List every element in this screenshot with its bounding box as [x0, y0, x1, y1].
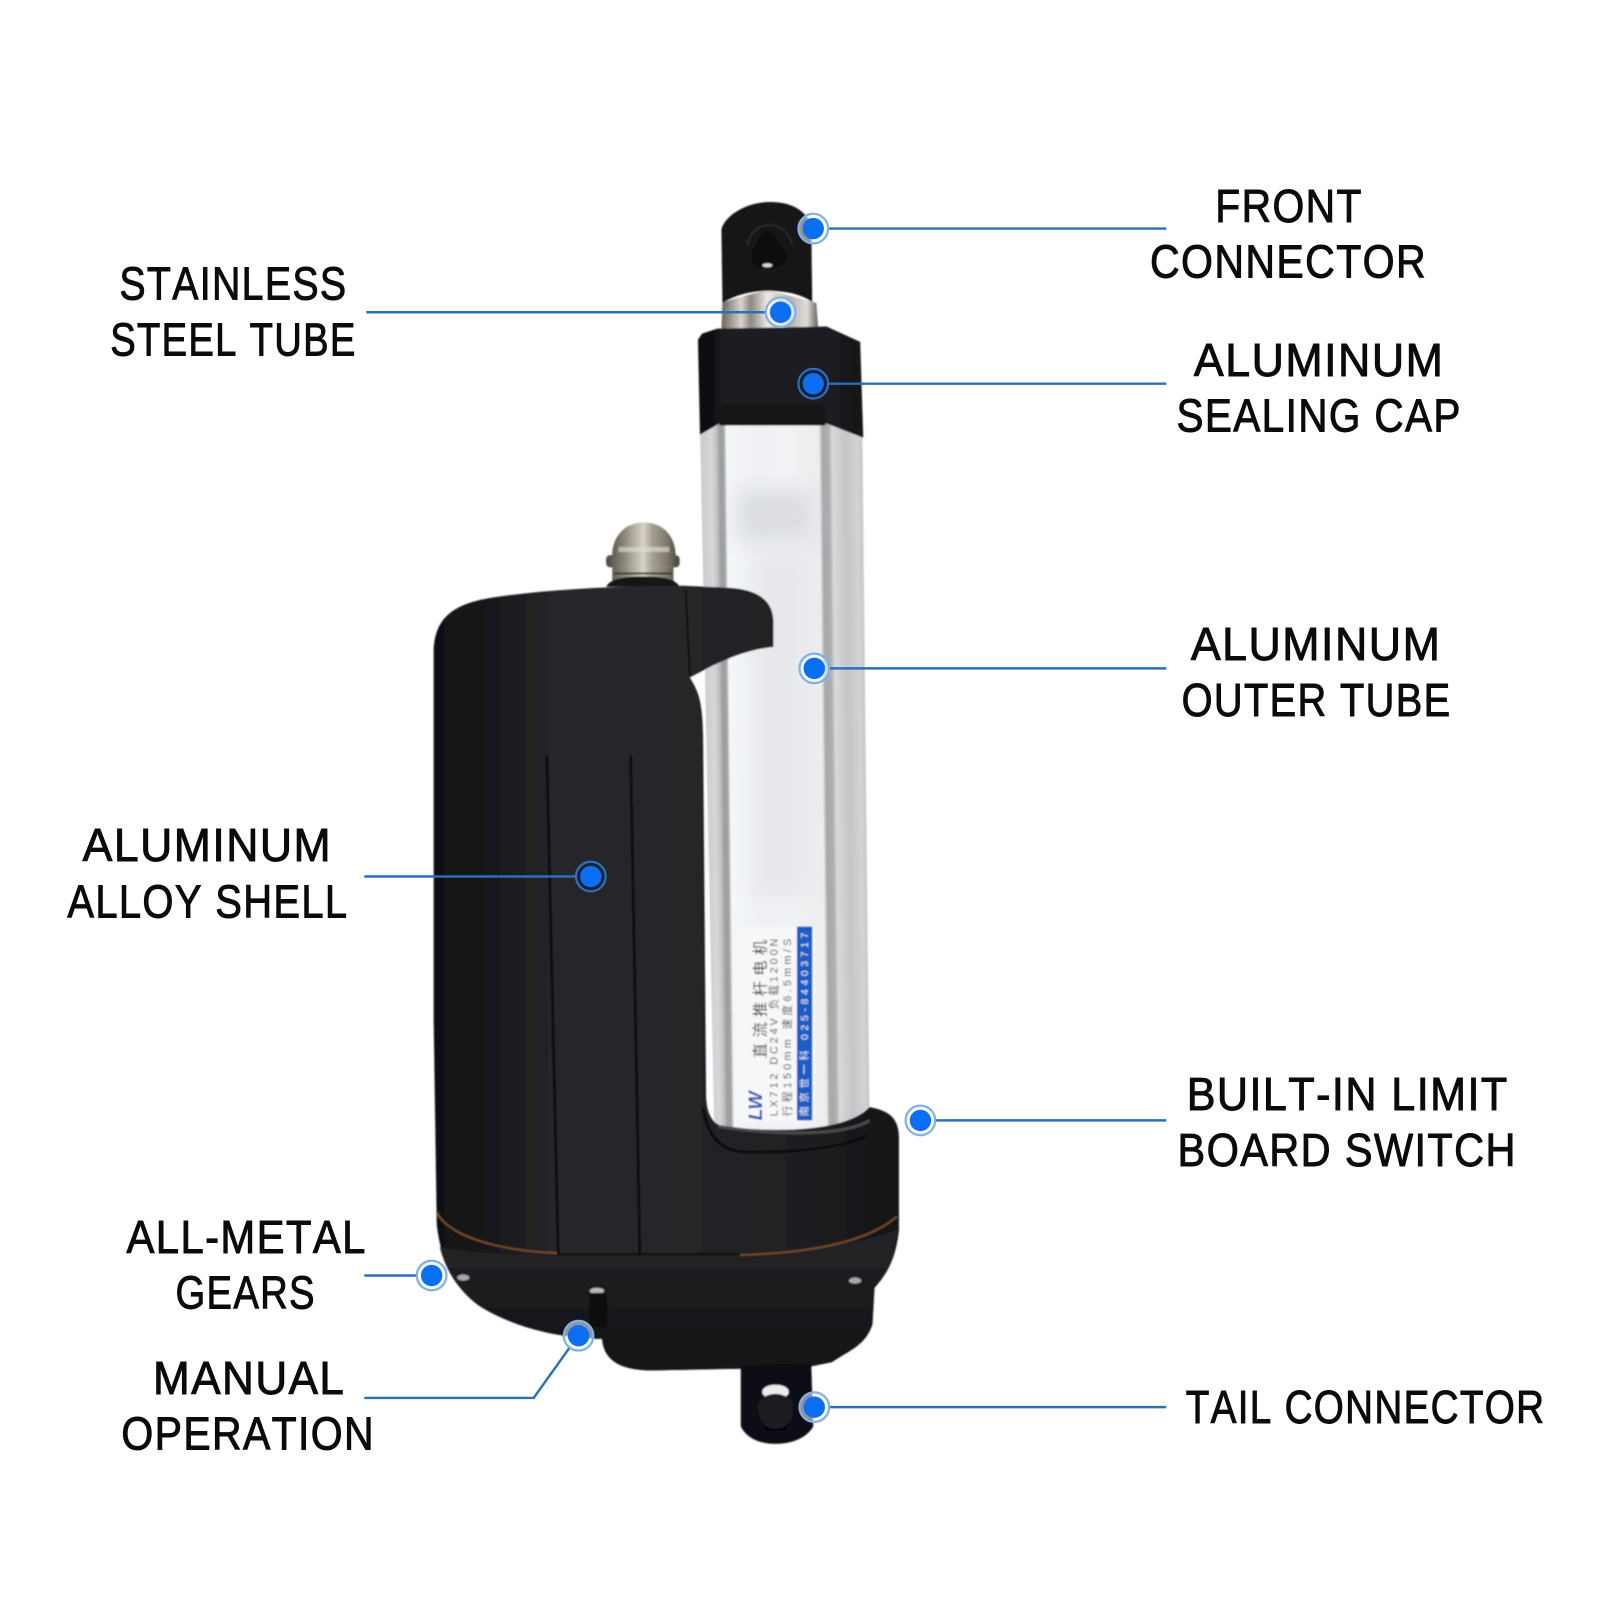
callout: manual operation: OPERATION: [121, 1407, 375, 1459]
callout: front connector: FRONT: [1215, 180, 1363, 232]
callout: tail connector: TAIL CONNECTOR: [1186, 1381, 1545, 1433]
product label: 行程150mm 速度6.5mm/S: [781, 939, 794, 1116]
aluminum outer tube: [700, 423, 869, 1135]
product label: LW: [745, 1090, 767, 1120]
aluminum sealing cap: [698, 327, 863, 438]
callout: aluminum sealing cap: SEALING CAP: [1177, 390, 1462, 442]
aluminum alloy shell body: [434, 586, 899, 1370]
callout: aluminum outer tube: ALUMINUM: [1191, 618, 1441, 670]
callout: all-metal gears: GEARS: [176, 1267, 316, 1319]
product label: [738, 927, 815, 1122]
callout: aluminum outer tube: [799, 618, 1452, 726]
callout: stainless steel tube: [110, 257, 795, 366]
callout: stainless steel tube: STEEL TUBE: [110, 314, 357, 366]
callout: built-in limit board switch: BOARD SWITCH: [1178, 1124, 1517, 1176]
stainless steel rod collar: [721, 290, 818, 330]
callout: all-metal gears: [127, 1211, 446, 1319]
callout: front connector: CONNECTOR: [1150, 236, 1427, 288]
callout: manual operation: MANUAL: [153, 1352, 345, 1404]
product label: LX712 DC24V 负载1200N: [768, 939, 781, 1116]
callout: manual operation: [121, 1321, 593, 1459]
callout: aluminum alloy shell: ALLOY SHELL: [67, 875, 348, 927]
product label: 直流推杆电机: [752, 940, 769, 1058]
callout: built-in limit board switch: [906, 1068, 1517, 1176]
callout: front connector: [798, 180, 1427, 288]
callout: aluminum outer tube: OUTER TUBE: [1182, 674, 1452, 726]
callout: aluminum alloy shell: [67, 819, 606, 927]
cable gland: [606, 522, 680, 587]
tail connector: [741, 1363, 813, 1444]
callout: stainless steel tube: STAINLESS: [119, 257, 347, 309]
callout: built-in limit board switch: BUILT-IN LIMIT: [1187, 1068, 1509, 1120]
front connector: [721, 202, 812, 303]
callout: all-metal gears: ALL-METAL: [127, 1211, 367, 1263]
callout: tail connector: [799, 1381, 1545, 1433]
callout: aluminum alloy shell: ALUMINUM: [83, 819, 332, 871]
callout: aluminum sealing cap: [798, 334, 1462, 442]
actuator product photo: [434, 202, 899, 1444]
callout: aluminum sealing cap: ALUMINUM: [1194, 334, 1444, 386]
product label: 南京世一科 025-84403717: [798, 932, 811, 1116]
